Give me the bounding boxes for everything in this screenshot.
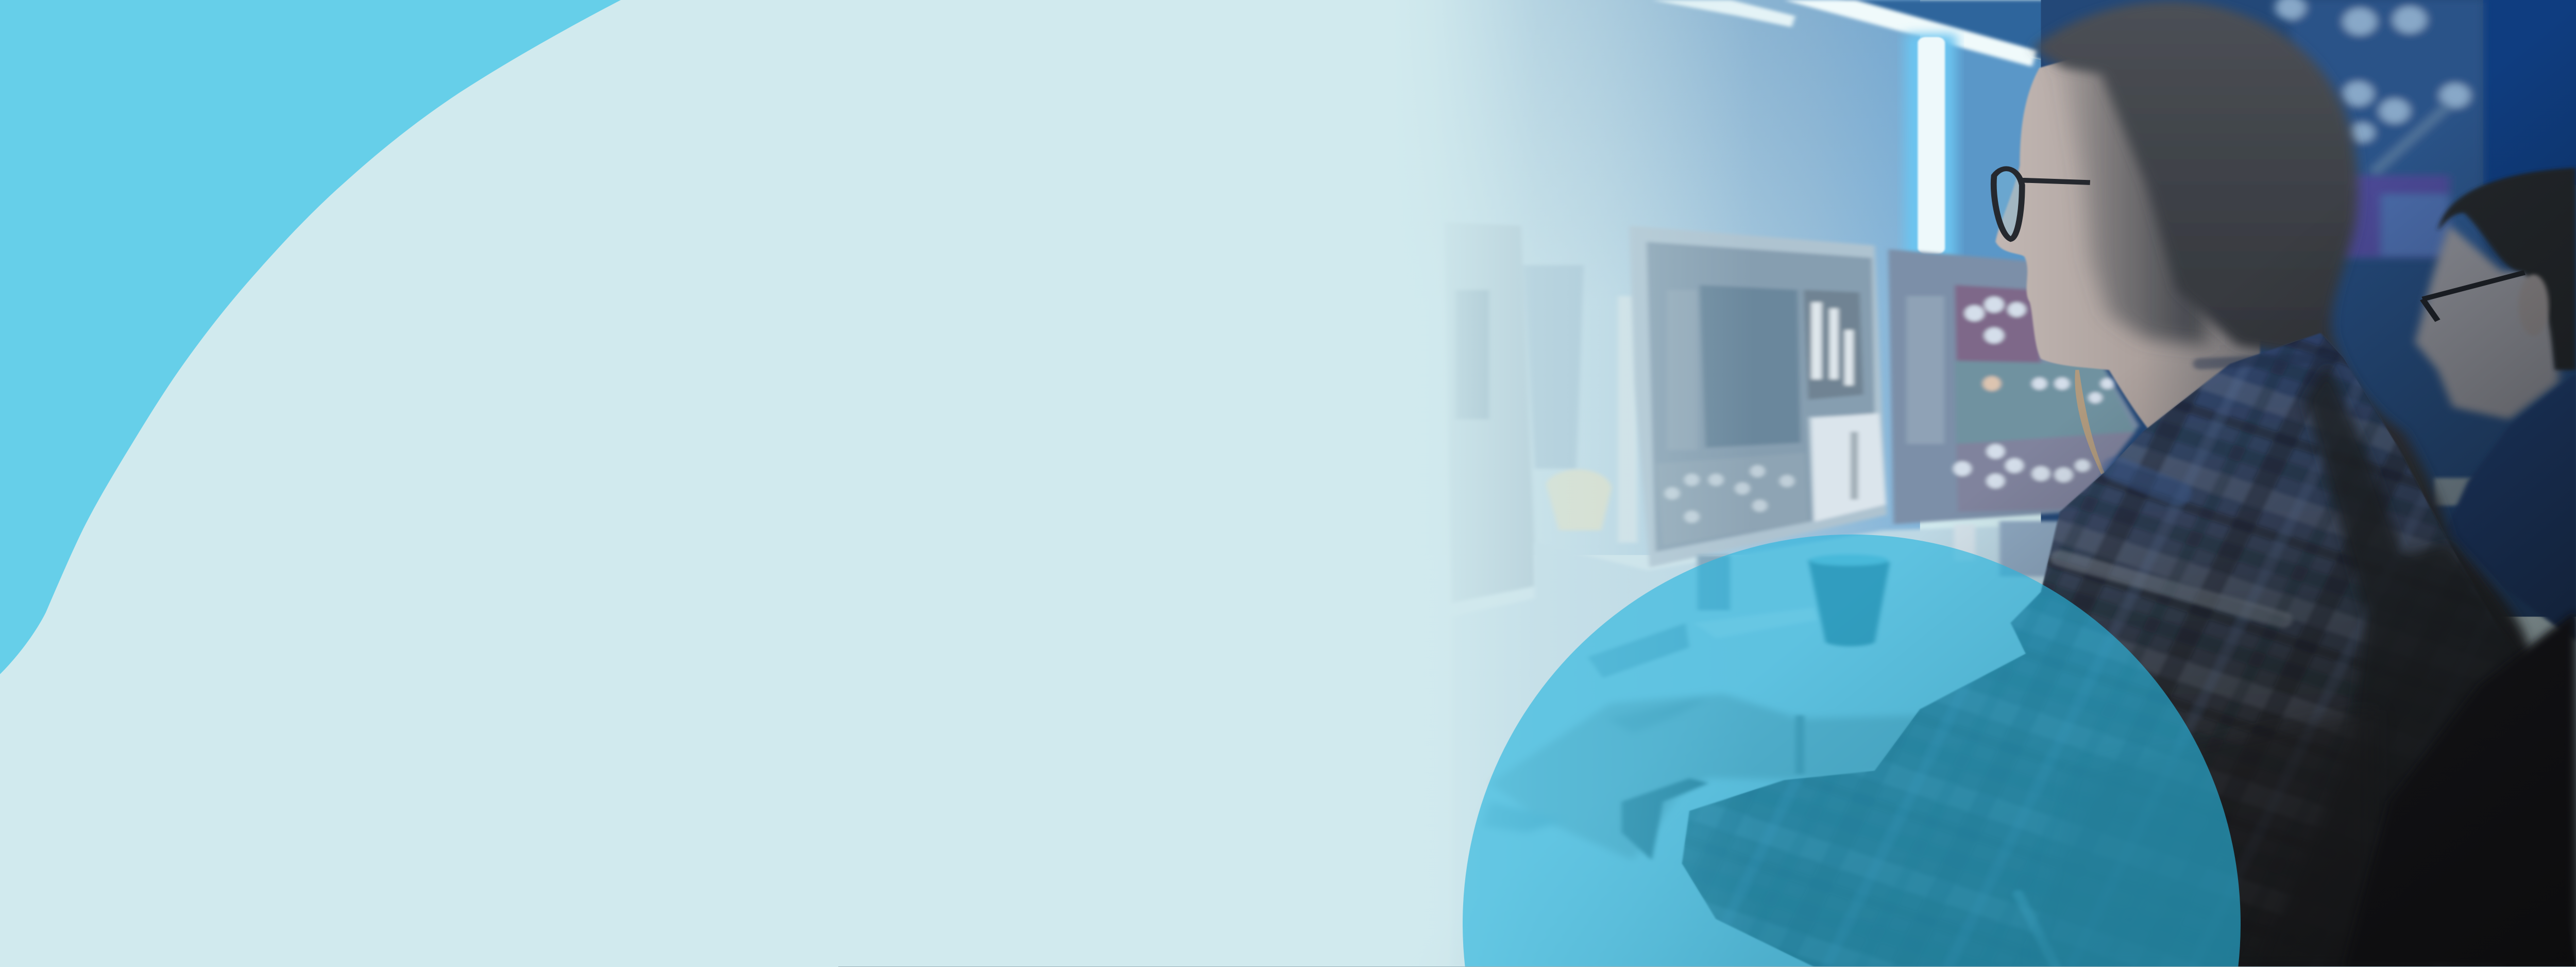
corner wave shape: [0, 0, 621, 674]
plaid highlights: [2018, 358, 2328, 967]
wall display with network nodes: [2275, 0, 2483, 259]
dark corner overlay: [1391, 0, 2576, 967]
vertical light: [1905, 34, 1956, 262]
chair: [2343, 610, 2576, 967]
shelf behind man: [2434, 478, 2479, 506]
watch and bracelet: [1621, 715, 1804, 860]
man's shirt: [2445, 373, 2576, 641]
hair strand: [2077, 370, 2103, 474]
second monitor: [1888, 249, 2139, 524]
lower shirt shade: [2033, 709, 2374, 967]
man's face: [2415, 225, 2558, 420]
bottom edge line: [838, 966, 2576, 967]
translucent circle: [1463, 535, 2241, 967]
plaid texture: [1678, 333, 2576, 967]
woman's side hair strands: [2041, 25, 2207, 345]
desk items: [1451, 521, 2071, 967]
paper cup: [1808, 555, 1890, 646]
woman's plaid shirt: [1682, 333, 2576, 967]
wall background: [1449, 0, 2576, 821]
woman's lower hair shadow: [2260, 364, 2529, 967]
left fade overlay: [1391, 0, 1754, 967]
man's glasses: [2422, 273, 2524, 321]
photo: control room: [1391, 0, 2576, 967]
left monitor: [1444, 222, 1637, 603]
man's hair: [2438, 168, 2576, 370]
man: [2415, 168, 2576, 641]
woman's face and neck: [1995, 37, 2260, 431]
man's ear: [2518, 274, 2549, 336]
woman's back hair: [2033, 1, 2529, 697]
woman's glasses: [1994, 169, 2090, 239]
main monitor: [1629, 226, 1887, 568]
hands and forearm: [1482, 694, 1935, 860]
woman: [1678, 1, 2576, 967]
ceiling light strips: [1652, 0, 2037, 66]
